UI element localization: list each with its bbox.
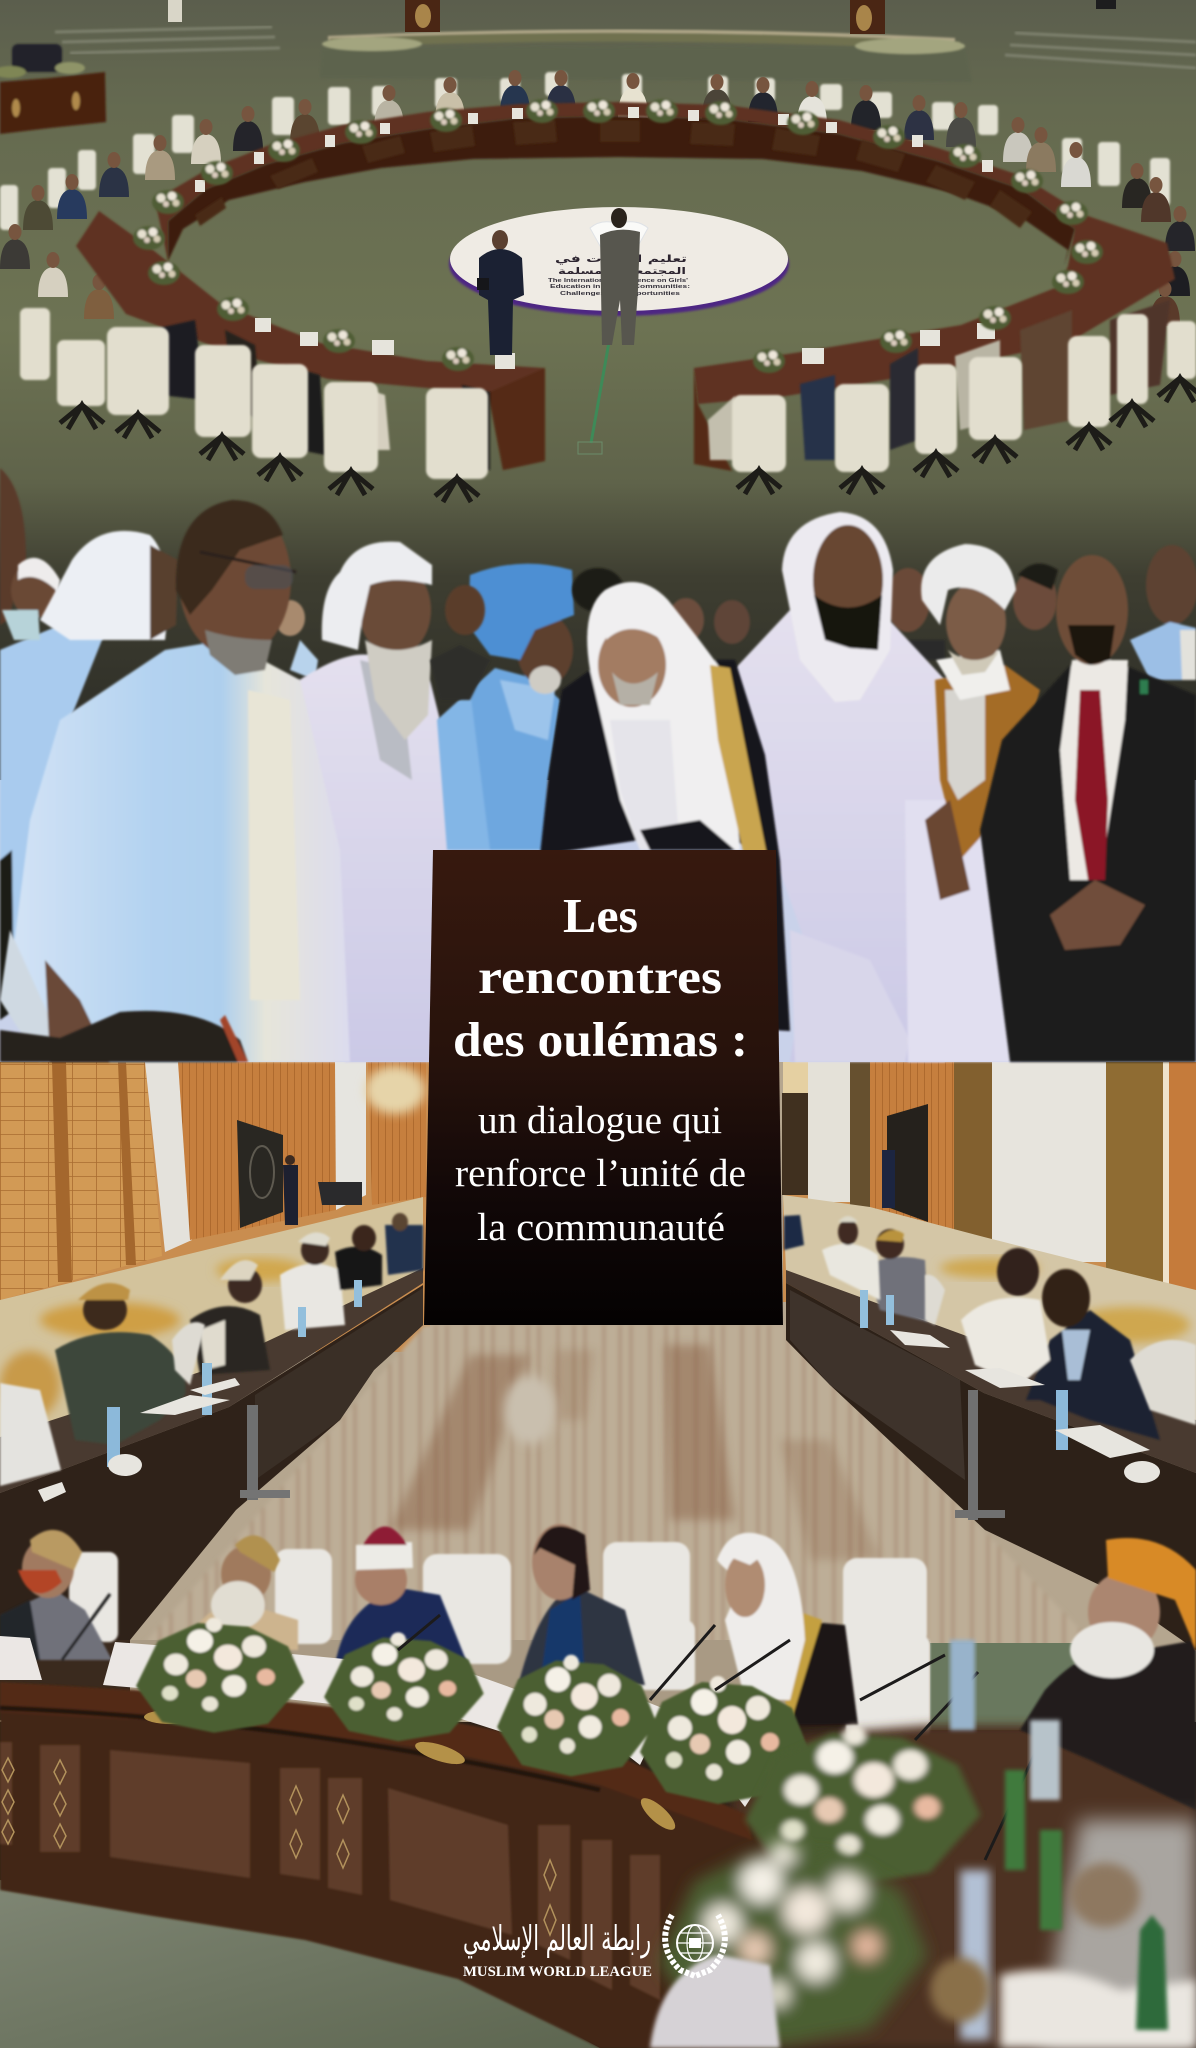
table surface beyond flowers, right side: [700, 1725, 1196, 2048]
central dais: Education in Muslim Communities:: [550, 284, 691, 290]
icon: globe and wreath: [665, 1915, 725, 1976]
delegate in dark blazer: [519, 1524, 645, 1685]
carpets: [0, 1195, 1196, 1490]
tall man in white headcloth: [715, 512, 955, 1062]
seated delegates seen from behind: [150, 300, 1170, 470]
title panel: [424, 850, 783, 1325]
subtitle: un dialogue qui: [478, 1099, 722, 1142]
background men with dark suits: [430, 564, 1058, 700]
microphones: [398, 1615, 1060, 1860]
table flower arrangements: [136, 1618, 808, 1804]
title: des oulémas :: [453, 1012, 748, 1067]
logo: Muslim World League: [463, 1915, 725, 1980]
man in dark suit with red tie: [980, 555, 1196, 1062]
gold table ornaments: [144, 1710, 680, 1835]
white chair backs, top row: [0, 72, 1170, 230]
delegate with orange turban: [1020, 1538, 1196, 1810]
podiums: [405, 0, 885, 34]
delegates, right table: [784, 1215, 1160, 1440]
title: [453, 888, 748, 1067]
table panels: [0, 1742, 660, 2000]
table: surface arc: [155, 102, 1175, 404]
near table arms: [76, 211, 732, 471]
central dais: [449, 207, 789, 316]
right table: [786, 1270, 1196, 1650]
title: Les: [563, 888, 638, 943]
central sheikh in white headcloth and black bisht: [717, 1533, 858, 1725]
central sheikh with bisht: [540, 582, 790, 1031]
stairs left: [55, 27, 280, 53]
far-left partial figure: [0, 468, 26, 625]
name cards: [195, 107, 995, 369]
gold diamonds: [2, 1758, 556, 1935]
right wall: [782, 1062, 1196, 1302]
standing figures at top: [168, 0, 1116, 22]
white chairs, near side: [20, 308, 1196, 479]
empty white chairs by the wall: [172, 1275, 1196, 1425]
flower arrangements on the ring: [133, 99, 1103, 373]
left desk: [0, 44, 106, 134]
subtitle: [455, 1099, 746, 1249]
small background head with mask: [2, 558, 60, 640]
central dais: Challenges and Opportunities: [560, 291, 680, 297]
photo: circular conference hall: [0, 0, 1196, 780]
background floor and carpet: [0, 1640, 1090, 2048]
man in white turban, blue robe: [40, 531, 178, 640]
title: rencontres: [478, 949, 722, 1004]
photo: hallway meeting room: [0, 1062, 1196, 1722]
blurred foreground flowers and tableware: [650, 1640, 1196, 2048]
streaky floor: [130, 1325, 1110, 1660]
photo: standing delegates: [0, 468, 1196, 1062]
chair bases: [60, 378, 1196, 502]
stairs right: [1005, 33, 1196, 68]
delegate with tan hat and white beard: [190, 1535, 298, 1650]
hallway floor base: [0, 1062, 1196, 1722]
white chair backs: [69, 1542, 930, 1740]
standing man, grey suit: [600, 208, 640, 345]
robe base behind figures: [0, 780, 1196, 1062]
water bottles and papers: [38, 1280, 1160, 1502]
photo: front table with delegates: [0, 1524, 1196, 2048]
leather chair in foreground: [0, 1011, 248, 1062]
seated delegates, far arc: [0, 70, 1195, 326]
delegate with tan hat and red beard: [0, 1530, 112, 1660]
green floor line: [578, 314, 614, 454]
man with white turban and orange vest: [905, 544, 1040, 1062]
English wordmark: MUSLIM WORLD LEAGUE: [463, 1964, 652, 1980]
blue turban man: [437, 564, 574, 850]
far-left blue robe: [0, 620, 110, 1020]
raised platform with garland: [320, 31, 972, 82]
Arabic wordmark: رابطة العالم الإسلامي: [463, 1919, 651, 1959]
far-right man with glasses: [1130, 545, 1196, 680]
central dais: المجتمعات المسلمة: [558, 267, 686, 277]
delegate with white and red turban: [335, 1526, 470, 1670]
subtitle: la communauté: [477, 1206, 725, 1249]
table panels: [195, 120, 1032, 228]
table: wooden front arc: [168, 116, 1075, 266]
left table: [0, 1268, 423, 1640]
wooden table front: [0, 1682, 780, 2048]
background small figure: [275, 600, 318, 680]
left wall: [0, 1062, 430, 1352]
central dais: The International Conference on Girls': [548, 278, 688, 284]
main man with glasses and blue robe: [0, 500, 350, 1062]
delegates, left table: [0, 1213, 423, 1486]
name cards: [0, 1636, 782, 1807]
standing man, navy suit: [477, 230, 524, 355]
central dais: تعليم الفتيات في: [555, 254, 687, 265]
white turban man: [285, 542, 458, 1062]
subtitle: renforce l’unité de: [455, 1152, 746, 1195]
